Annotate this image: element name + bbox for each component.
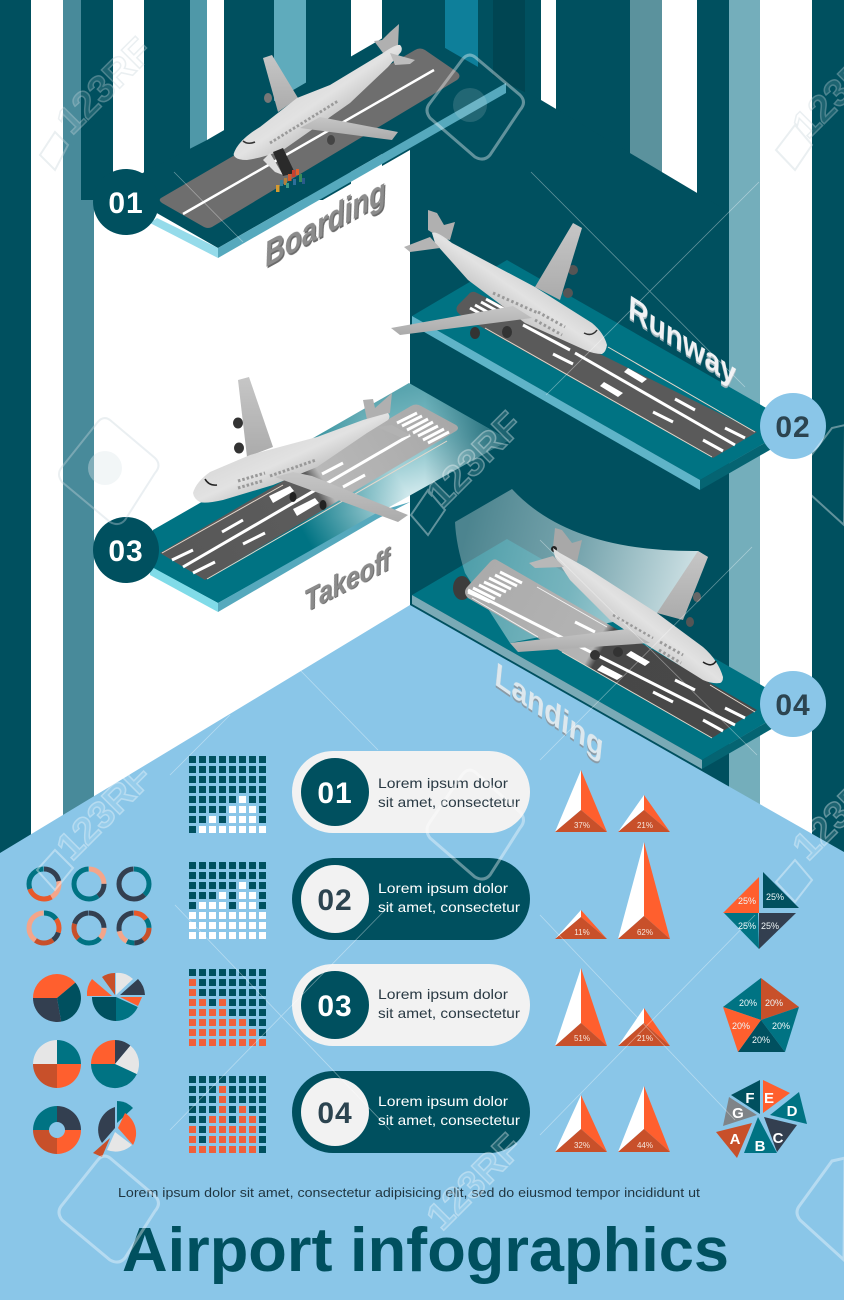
ring charts [29,869,149,943]
label: Landing: Landing [493,655,605,766]
ring chart 4 [29,913,59,943]
pinwheel chart [723,872,799,949]
pyramid 44% [618,1086,670,1152]
pentagon chart: 20% [739,998,757,1008]
pill 02: sit amet, consectetur [378,899,520,915]
pinwheel chart: 25% [738,921,756,931]
pie chart 4 [91,1040,139,1088]
ring chart 3 [119,869,149,899]
pentagon chart: 20% [732,1021,750,1031]
platform: landing [412,489,796,769]
pill 03: 03 [317,990,353,1023]
watermarks: 123RF [418,1125,530,1238]
pill 02 [292,858,530,940]
pill 04: 04 [317,1097,353,1130]
pyramid 37%: 37% [574,821,590,830]
pyramid 21% [618,795,670,832]
pie chart 3 [33,1040,81,1088]
heptagon letter chart: G [732,1105,744,1122]
pyramid 62% [618,842,670,939]
pyramid 32%: 32% [574,1141,590,1150]
square grid 2 [189,862,269,942]
pentagon chart: 20% [772,1021,790,1031]
pill 03 [292,964,530,1046]
runway strip: landing [453,559,757,738]
square grid 4 [189,1076,269,1156]
pill 02: Lorem ipsum dolor [378,880,508,896]
ring chart 2 [74,869,104,899]
pill 02: 02 [317,884,353,917]
pill 01: Lorem ipsum dolor [378,775,508,791]
pill 04 [292,1071,530,1153]
pinwheel chart: 25% [738,896,756,906]
dark right wall [410,83,729,800]
plane: boarding [234,24,415,192]
floor [0,605,844,1300]
badge 02 [760,393,826,459]
runway strip: takeoff [160,404,458,580]
square grid 1 [189,756,269,836]
pill 04: Lorem ipsum dolor [378,1093,508,1109]
pyramid 51%: 51% [574,1034,590,1043]
badge 04: 04 [775,689,811,722]
pyramid 21%: 21% [637,821,653,830]
heptagon letter chart: D [787,1103,798,1120]
pinwheel chart: 25% [766,892,784,902]
plane: runway [391,210,607,354]
watermarks: 123RF [48,755,160,868]
pinwheel chart: 25% [761,921,779,931]
pyramid 32% [555,1095,607,1152]
pill 03: sit amet, consectetur [378,1005,520,1021]
label: Takeoff: Takeoff [302,541,395,618]
platform: runway [412,260,796,490]
subtitle: Lorem ipsum dolor sit amet, consectetur adipisicing elit, sed do eiusmod tempor incididunt ut [118,1185,700,1200]
pyramid 51% [555,968,607,1046]
pill 04: sit amet, consectetur [378,1112,520,1128]
square grid 3 [189,969,269,1049]
badge 02: 02 [775,411,811,444]
donut chart [33,1106,81,1154]
translucent flight path [455,489,708,643]
heptagon letter chart: E [764,1090,774,1107]
ring chart 6 [119,913,149,943]
heptagon letter chart: B [755,1138,766,1155]
pyramid 37% [555,770,607,832]
ring chart 5 [74,913,104,943]
label: Runway: Runway [628,288,737,393]
heptagon letter chart: C [773,1130,784,1147]
plane: landing [510,528,723,683]
pyramid 44%: 44% [637,1141,653,1150]
pyramid 21% second: 21% [637,1034,653,1043]
pentagon chart: 20% [752,1035,770,1045]
pie chart 2 [87,973,145,1021]
background stripes [0,0,844,900]
watermarks: 123RF [418,403,530,516]
watermarks: 123RF [48,29,160,142]
platform: takeoff [150,383,509,612]
pie chart 1 [33,974,81,1022]
pill 03: Lorem ipsum dolor [378,986,508,1002]
icon: boarding stairs [263,148,295,176]
pentagon chart [723,978,799,1052]
pentagon chart: 20% [765,998,783,1008]
badge 01: 01 [108,187,144,220]
ring chart 1 [29,869,59,899]
heptagon letter chart: A [730,1131,741,1148]
pill 01: 01 [317,777,353,810]
white wall [94,150,410,800]
title: Airport infographics [122,1216,729,1285]
exploded pie chart [93,1101,136,1157]
platform: boarding [94,28,506,258]
badge 03 [93,517,159,583]
pyramid 21% second [618,1008,670,1046]
badge 03: 03 [108,535,144,568]
badge 01 [93,169,159,235]
runway: boarding [160,48,459,228]
label: Boarding: Boarding [262,171,388,275]
icon: passengers [276,169,305,192]
runway strip: runway [456,292,757,458]
pyramid 11% [555,910,607,939]
pill 01: sit amet, consectetur [378,794,520,810]
pyramid 62%: 62% [637,928,653,937]
pyramid 11%: 11% [574,928,590,937]
pill 01 [292,751,530,833]
heptagon letter chart: F [745,1090,755,1107]
heptagon letter chart [716,1080,807,1158]
badge 04 [760,671,826,737]
plane: takeoff [193,377,410,522]
